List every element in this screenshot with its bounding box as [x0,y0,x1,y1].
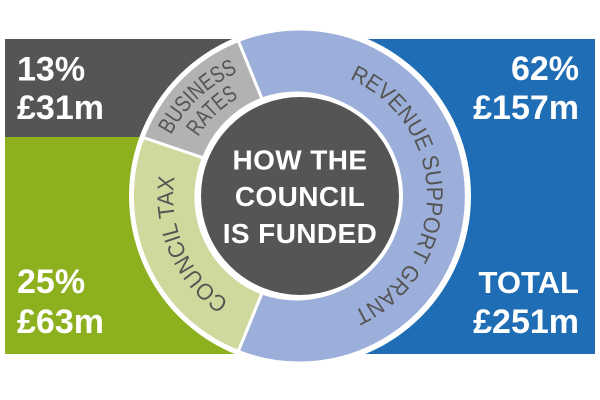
centre title: COUNCIL [235,181,365,212]
label: revenue support grant: REVENUE SUPPORT GRANT [351,66,443,326]
stat: total: TOTAL [479,265,579,300]
label: council tax: COUNCIL TAX [157,176,226,311]
centre title: HOW THE [232,144,368,176]
ring outline [129,25,471,367]
centre title: IS FUNDED [223,218,377,249]
panel: revenue support grant background [300,39,595,354]
segment: business rates [143,41,262,158]
stat: business rates: 13% [17,50,85,88]
stat: revenue support grant: 62% [511,50,579,88]
segment: council tax [132,138,262,351]
stat: total [473,265,579,341]
label: business rates: RATES [186,86,236,136]
label: business rates: BUSINESS [158,60,236,134]
donut chart [129,25,471,367]
centre title [223,144,377,249]
centre circle [199,95,401,297]
stat: revenue support grant [473,50,579,127]
stat: total: £251m [473,303,579,341]
stat: council tax: 25% [17,263,85,301]
panel: business rates background [5,39,245,137]
segment: revenue support grant [238,29,466,363]
panel: council tax background [5,137,245,354]
stat: business rates: £31m [17,89,104,127]
stat: business rates [17,50,104,127]
stat: council tax: £63m [17,303,104,341]
stat: revenue support grant: £157m [473,89,579,127]
stat: council tax [17,263,104,341]
